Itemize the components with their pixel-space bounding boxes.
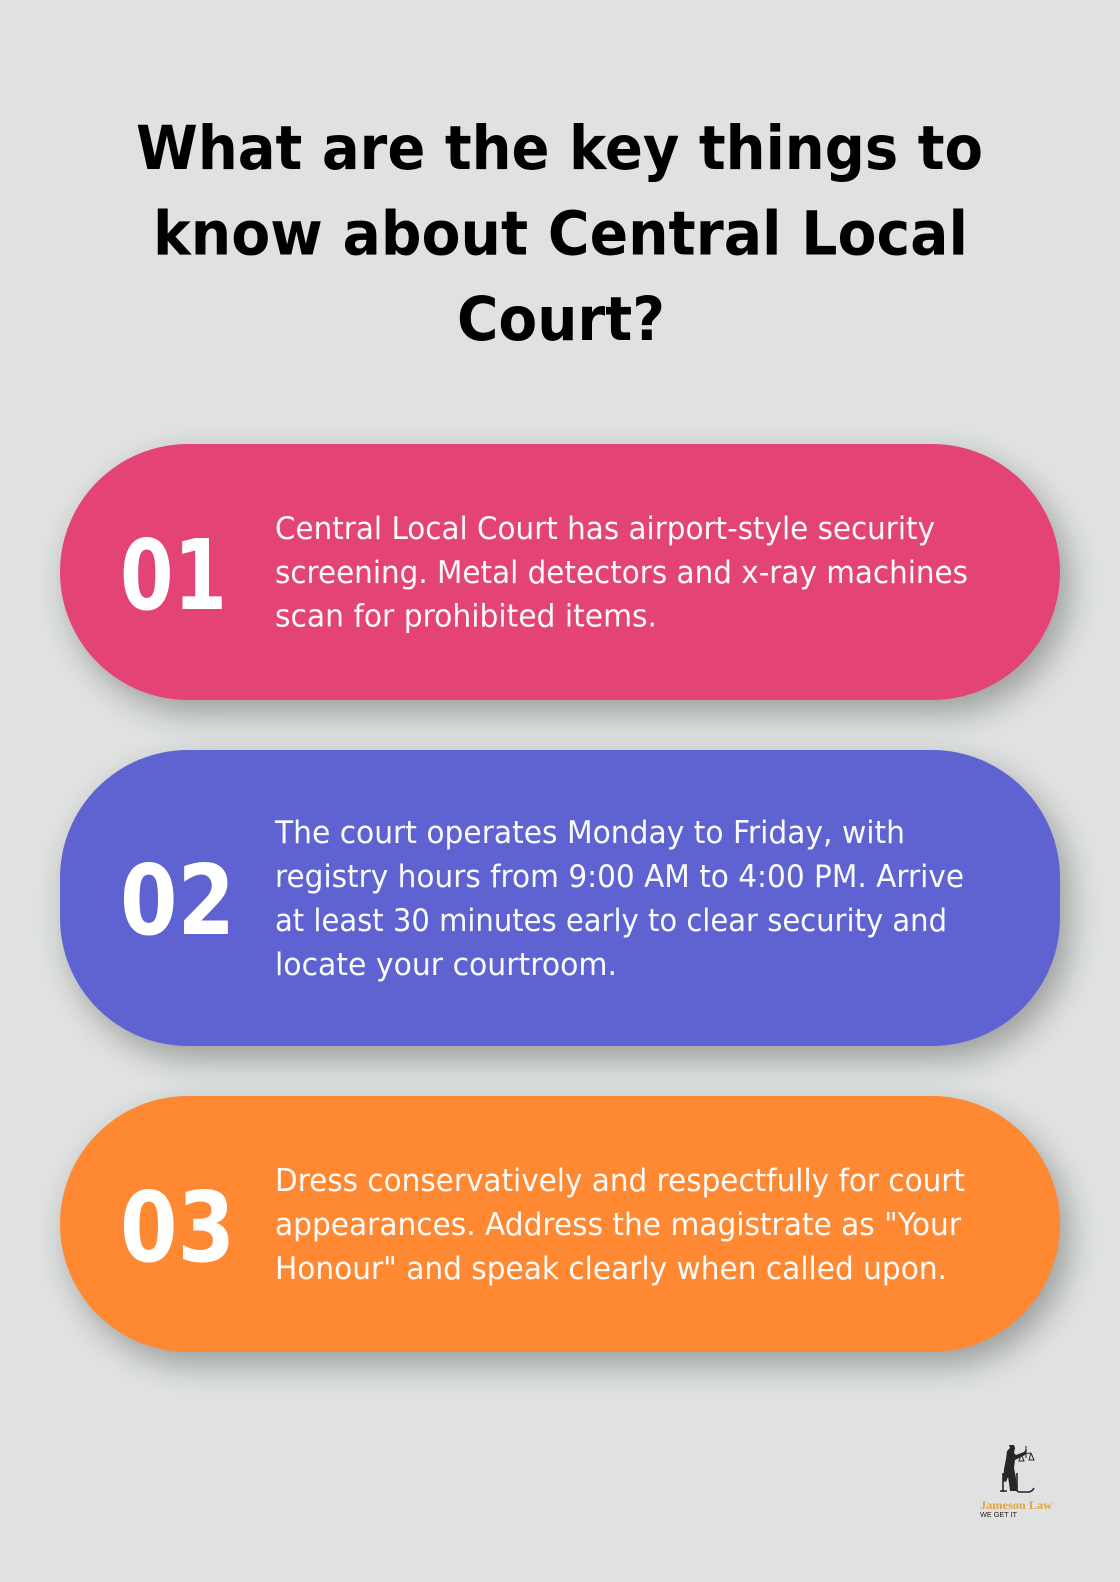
title xyxy=(136,113,983,355)
text: dress and etiquette: Dress conservatively and respectfully for court xyxy=(275,1163,965,1199)
text: dress and etiquette xyxy=(275,1163,965,1287)
text: security screening xyxy=(275,511,968,634)
text: opening hours: locate your courtroom. xyxy=(275,947,617,983)
panel: dress and etiquette xyxy=(60,1096,1069,1365)
text: security screening: Central Local Court has airport-style security xyxy=(275,511,935,547)
title: know about Central Local xyxy=(153,198,968,270)
text: security screening: scan for prohibited items. xyxy=(275,598,657,634)
number 01: 01 xyxy=(120,519,227,632)
text: WE GET IT: WE GET IT xyxy=(980,1512,1018,1519)
text: security screening: screening. Metal detectors and x-ray machines xyxy=(275,555,968,591)
number 02: 02 xyxy=(120,844,235,957)
icon: lady justice xyxy=(1000,1445,1034,1492)
text: dress and etiquette: Honour" and speak clearly when called upon. xyxy=(275,1251,947,1287)
text: opening hours: The court operates Monday to Friday, with xyxy=(274,815,905,851)
panel: opening hours xyxy=(60,750,1069,1059)
panel: security screening xyxy=(60,444,1069,713)
text: dress and etiquette: appearances. Address the magistrate as "Your xyxy=(275,1207,961,1243)
text: opening hours: at least 30 minutes early to clear security and xyxy=(275,903,947,939)
text: opening hours: registry hours from 9:00 AM to 4:00 PM. Arrive xyxy=(275,859,964,895)
title: What are the key things to xyxy=(136,113,983,184)
title: Court? xyxy=(457,284,665,355)
logo: Jameson Law xyxy=(980,1445,1052,1519)
number 03: 03 xyxy=(120,1171,235,1284)
text: Jameson Law: Jameson Law xyxy=(980,1498,1052,1512)
text: opening hours xyxy=(274,815,964,983)
